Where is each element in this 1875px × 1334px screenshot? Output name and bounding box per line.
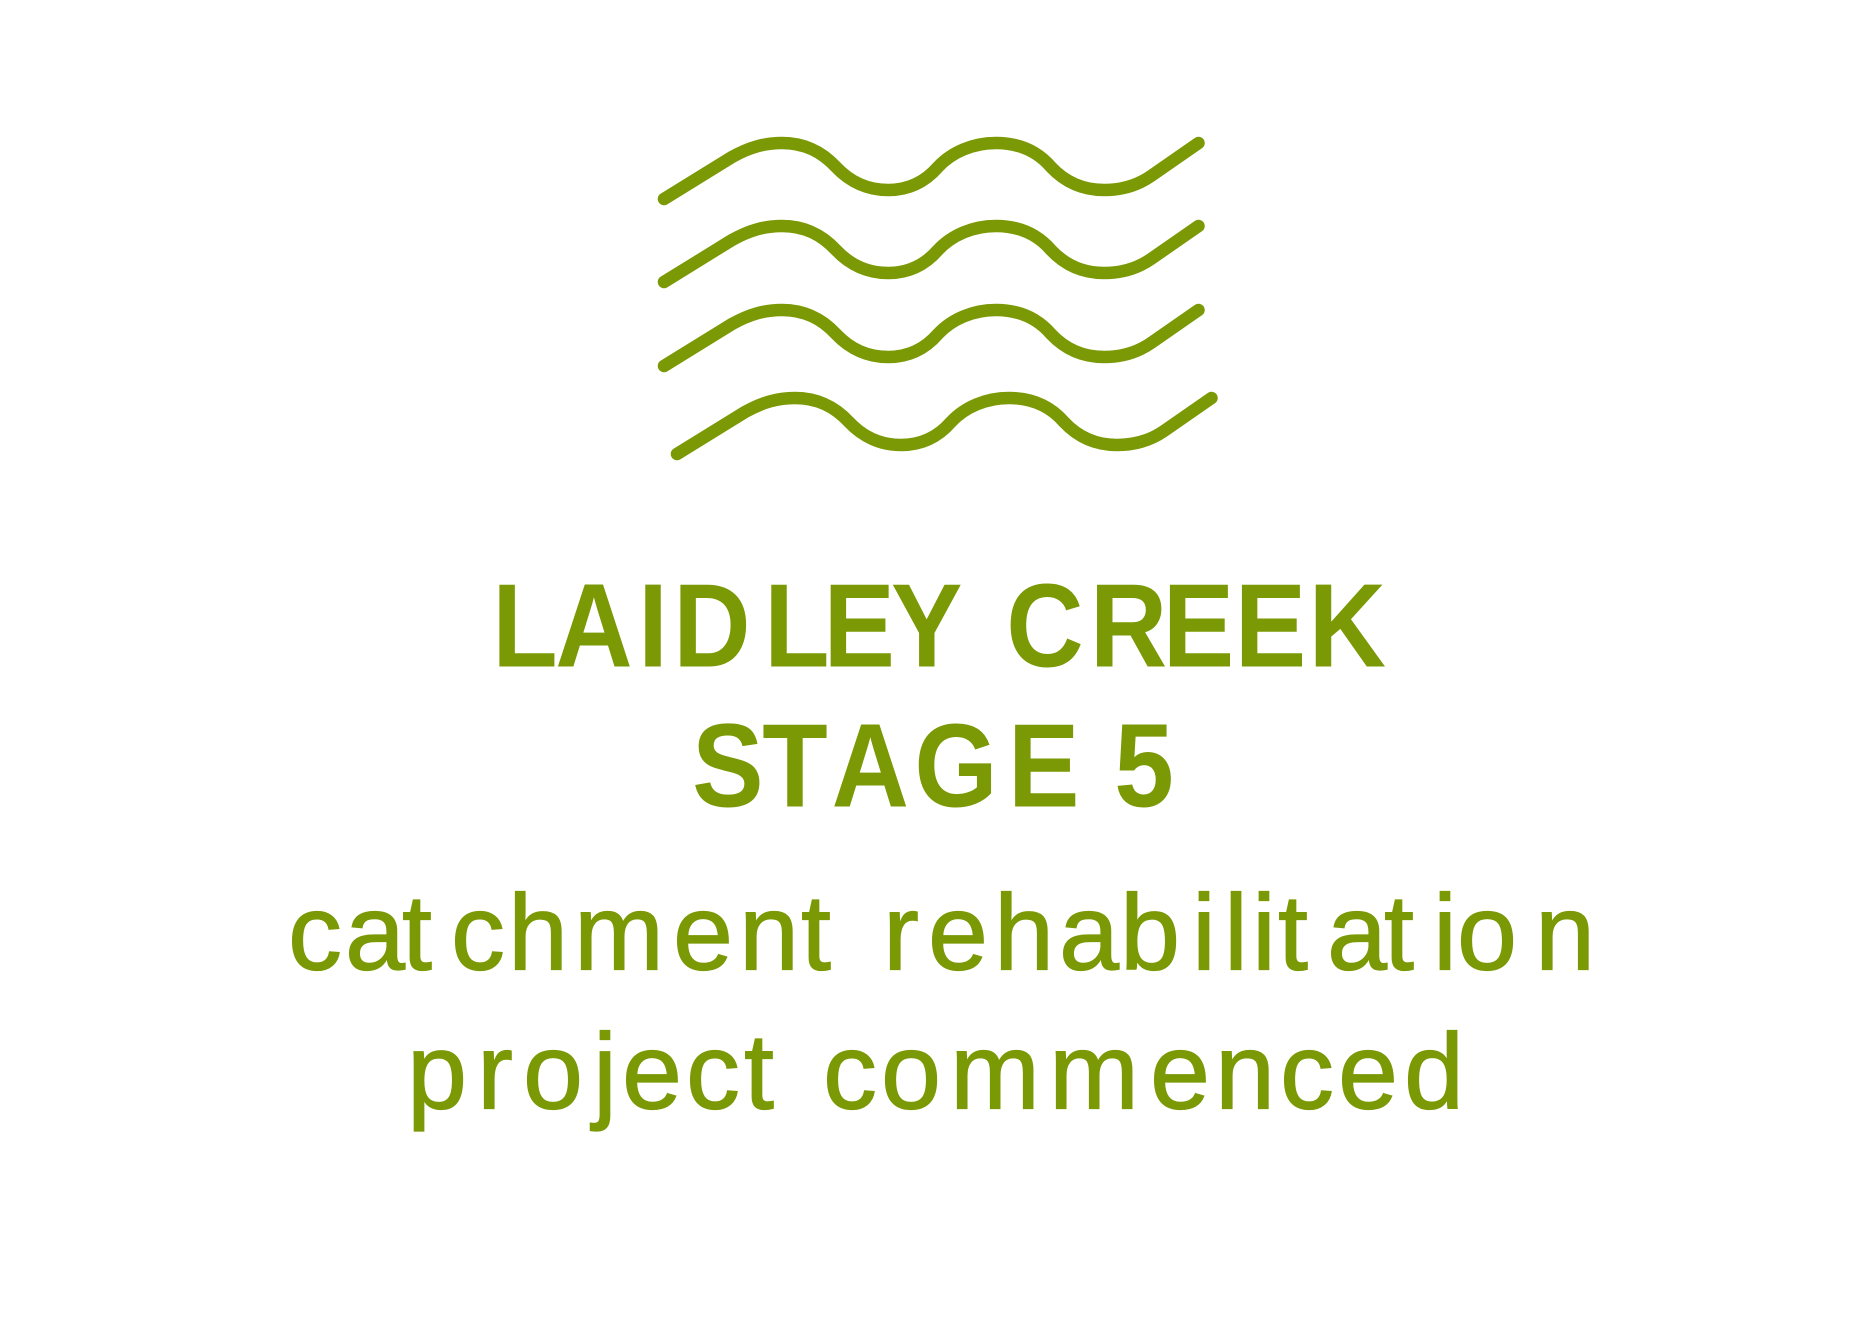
subtitle: catchment rehabilitation xyxy=(288,872,1595,992)
heading: LAIDLEY CREEK xyxy=(492,559,1386,692)
heading: STAGE 5 xyxy=(692,699,1174,832)
heading xyxy=(492,559,1386,832)
subtitle: project commenced xyxy=(407,1010,1464,1132)
subtitle xyxy=(288,872,1595,1132)
icon: water waves xyxy=(664,143,1212,454)
